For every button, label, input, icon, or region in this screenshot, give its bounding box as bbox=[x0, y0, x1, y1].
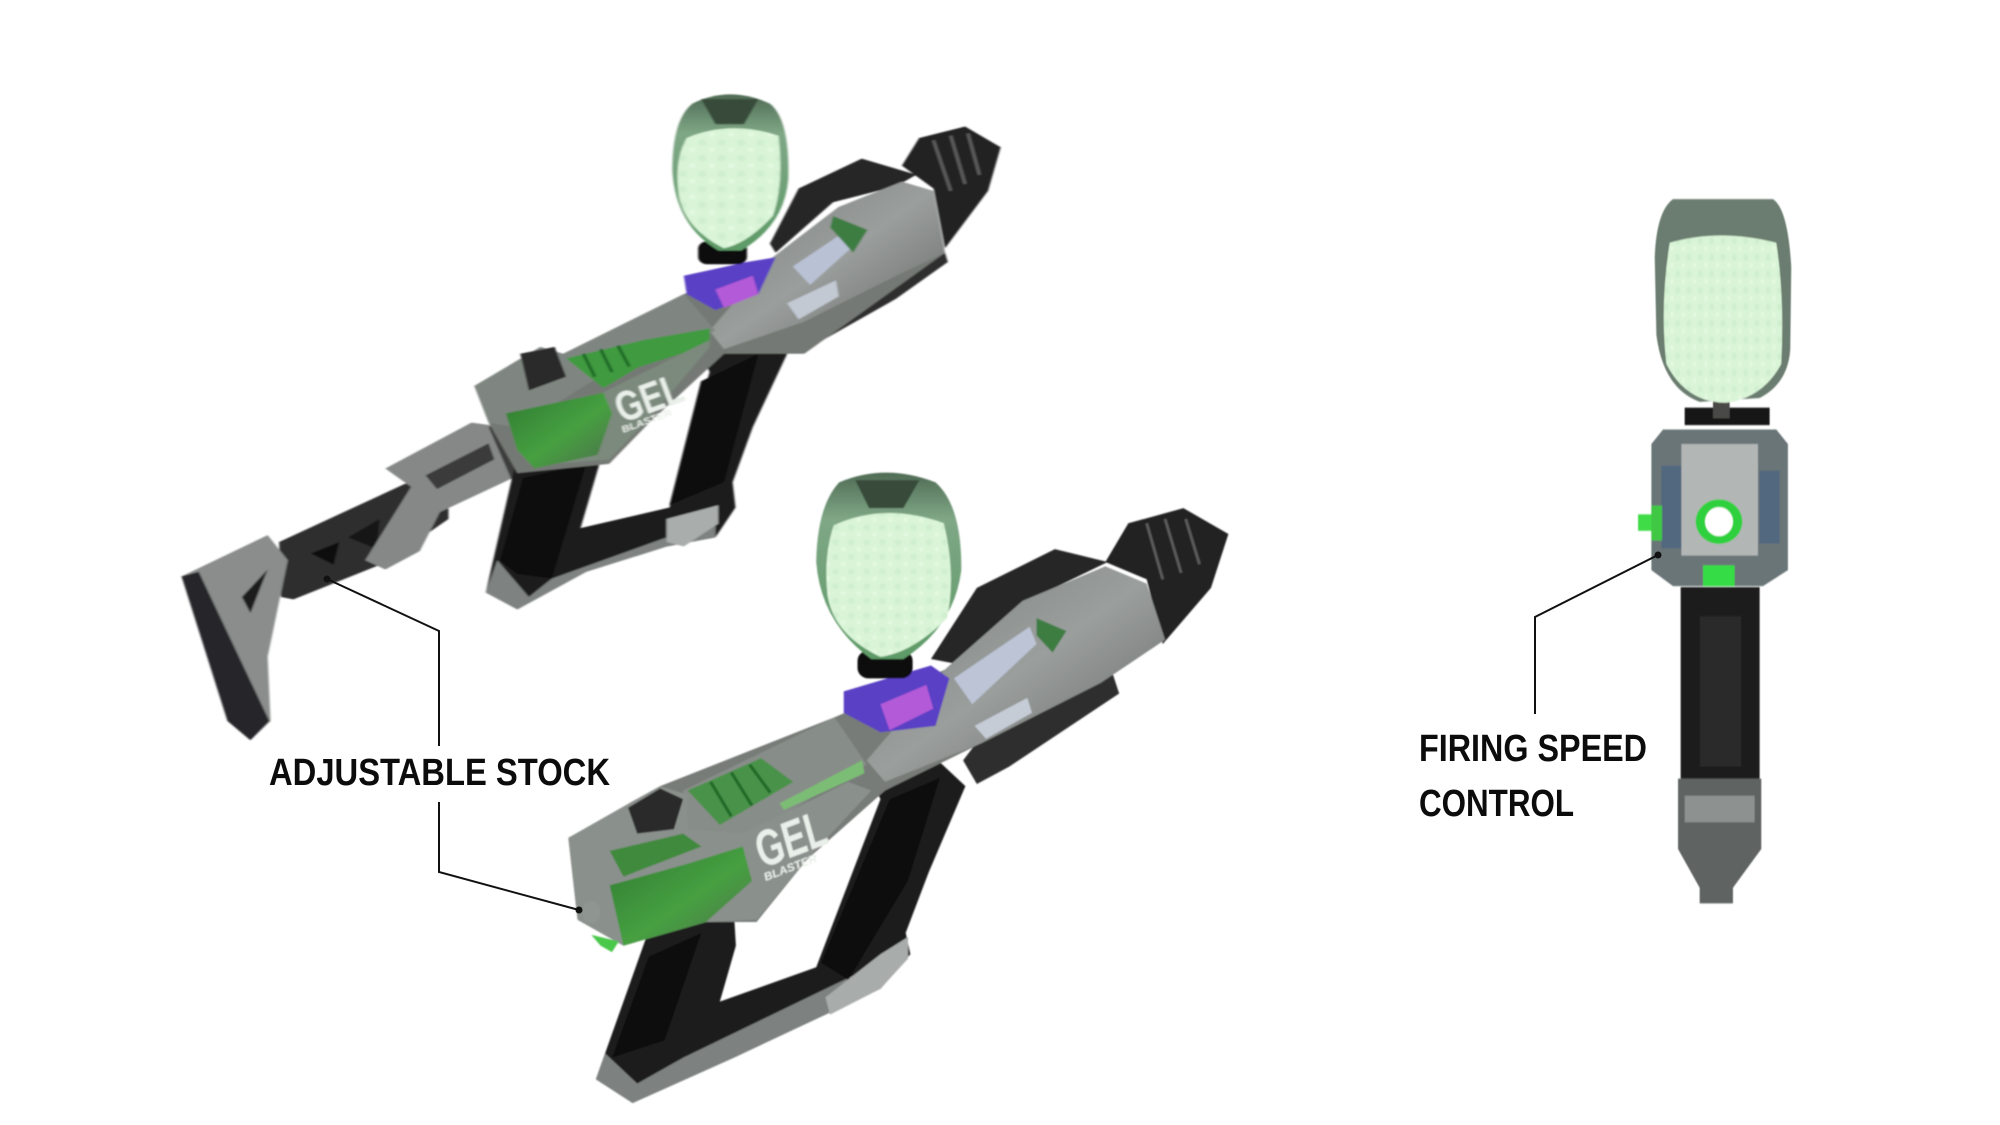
rear under-barrel bbox=[781, 244, 948, 354]
body base bbox=[474, 207, 945, 473]
logo: BLASTER bbox=[762, 853, 820, 884]
feed mount bbox=[684, 257, 776, 310]
green ring bbox=[1696, 499, 1742, 544]
grip bbox=[1681, 587, 1760, 781]
logo: GEL bbox=[746, 801, 836, 879]
hopper bbox=[672, 94, 788, 264]
top front shell bbox=[683, 717, 867, 851]
label: firing speed control bbox=[1419, 728, 1647, 825]
top front shell bbox=[474, 294, 715, 427]
rear receiver bbox=[710, 182, 945, 349]
under-barrel bbox=[963, 666, 1119, 784]
front dial bbox=[582, 901, 600, 923]
logo: GEL bbox=[605, 366, 693, 431]
blaster: upper view with extended stock bbox=[182, 94, 1001, 740]
blaster: lower view with retracted stock bbox=[568, 473, 1228, 1103]
hopper bbox=[1655, 199, 1791, 403]
speed dial bbox=[1638, 506, 1662, 541]
leader line: stock, lower blaster bbox=[439, 802, 582, 914]
grip and trigger frame bbox=[486, 331, 787, 609]
feed mount bbox=[844, 666, 949, 732]
front block bbox=[568, 782, 871, 952]
stock arm bbox=[279, 418, 540, 599]
label: firing speed control: FIRING SPEED bbox=[1419, 728, 1647, 770]
body base bbox=[568, 566, 1165, 946]
logo: BLASTER bbox=[620, 408, 675, 435]
rear receiver bbox=[867, 566, 1165, 782]
lower grip cap bbox=[1678, 779, 1761, 903]
callout: firing speed control bbox=[1419, 552, 1662, 825]
receiver body bbox=[1651, 429, 1788, 586]
hopper neck bbox=[1685, 394, 1770, 425]
green tab bbox=[1703, 565, 1735, 586]
label: adjustable stock: ADJUSTABLE STOCK bbox=[269, 752, 610, 794]
grip and trigger frame bbox=[596, 762, 965, 1103]
leader line: stock, upper blaster bbox=[324, 576, 439, 746]
hopper bbox=[816, 473, 961, 678]
muzzle bbox=[902, 127, 1001, 248]
leader line: firing speed bbox=[1535, 552, 1662, 714]
blaster: rear view bbox=[1638, 199, 1791, 903]
muzzle bbox=[1105, 508, 1228, 644]
callout: adjustable stock bbox=[269, 576, 610, 914]
carry rail bbox=[931, 549, 1108, 663]
label: firing speed control: CONTROL bbox=[1419, 783, 1574, 825]
stock butt bbox=[182, 535, 288, 740]
carry rail bbox=[770, 159, 916, 253]
green front body bbox=[506, 329, 710, 469]
